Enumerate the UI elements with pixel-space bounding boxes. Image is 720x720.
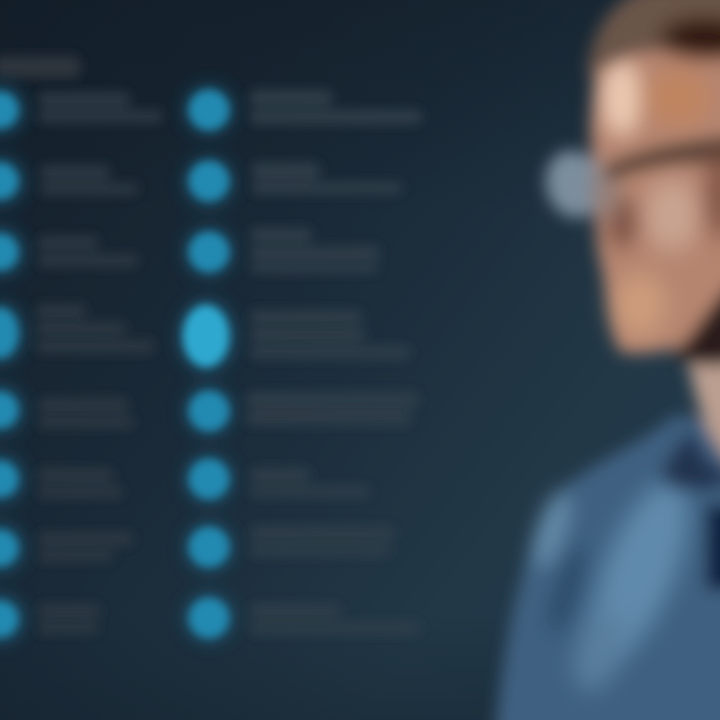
left marker dots [0,92,18,637]
glasses bridge [591,160,619,220]
collar placket [706,505,720,590]
nose shadow [607,196,637,248]
sleeve fold [542,543,592,637]
left list text rows [36,92,163,634]
panel: left list [0,86,163,643]
right list text rows [246,90,422,634]
right list markers [179,86,235,642]
left list markers [0,86,24,643]
hair [588,0,720,75]
panel: right list [179,86,422,642]
glasses frame and brow [605,134,720,182]
right marker halos [179,86,235,642]
glasses [538,134,720,224]
hair dark [663,20,720,56]
forehead orange [646,70,710,126]
shoulder highlight [526,488,578,572]
lower highlight [565,603,635,697]
beard shadow [672,275,720,365]
right marker dots [183,90,229,638]
lower face [614,273,666,337]
forehead highlight [602,60,642,136]
shirt [495,415,720,720]
collar [662,430,720,490]
shirt base [495,415,720,720]
neck [686,345,720,470]
person [495,0,720,720]
heading [0,56,80,78]
face [590,45,720,353]
glasses lens [538,144,610,224]
chest highlight [573,469,707,671]
side face shade [708,150,720,240]
left marker halos [0,86,24,643]
cheek [644,179,700,251]
